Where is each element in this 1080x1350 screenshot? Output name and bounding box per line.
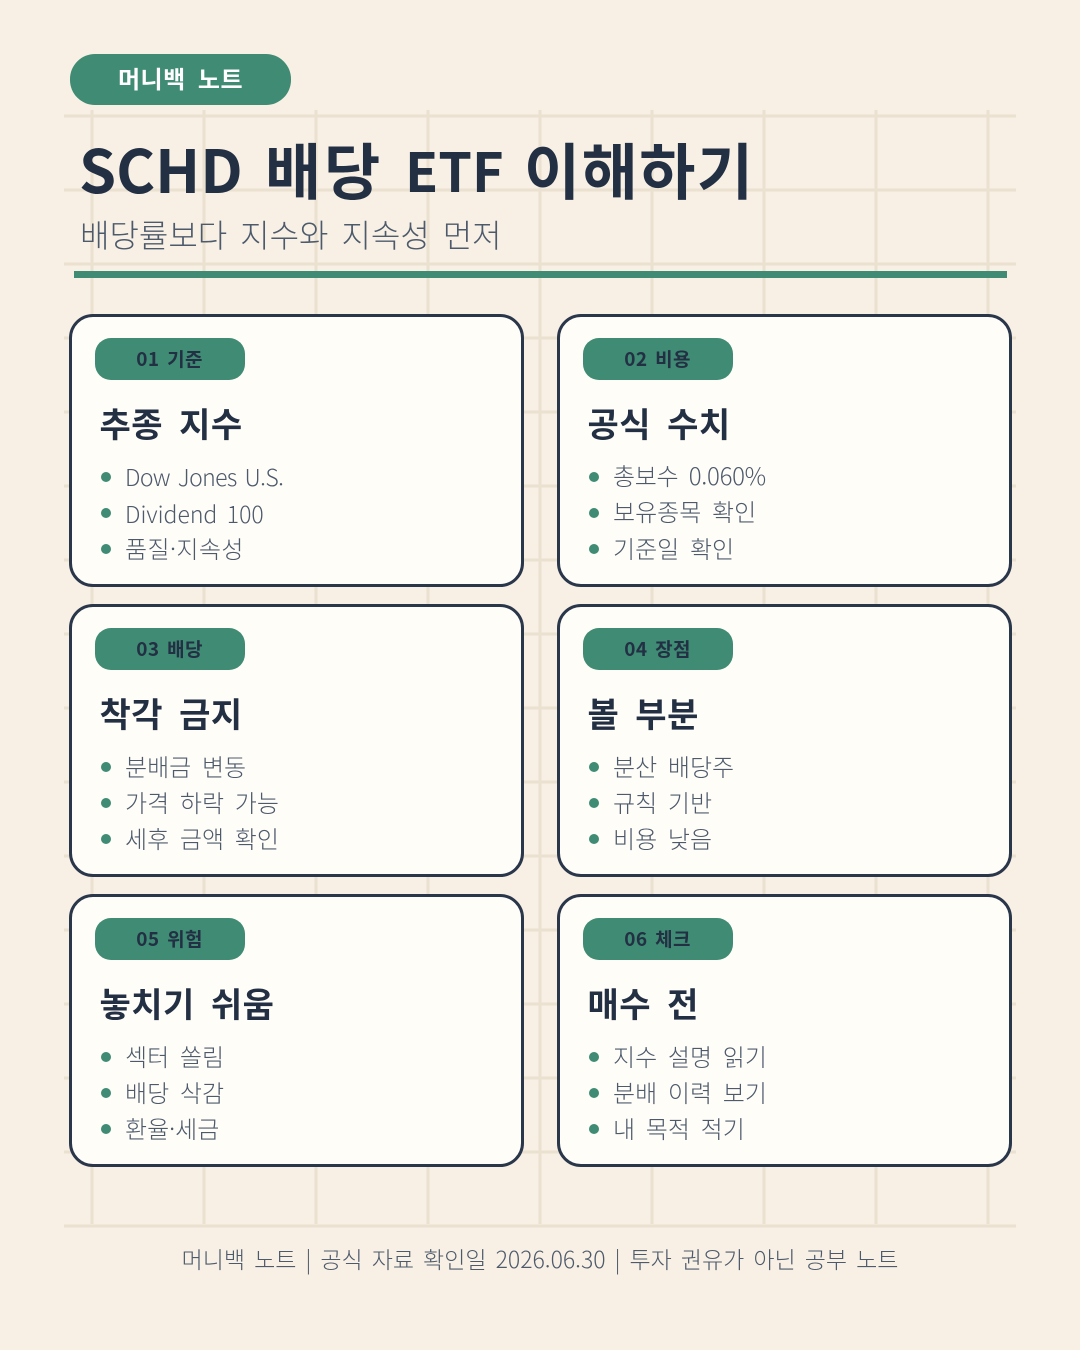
tag: 05: 05 위험 [136,925,203,952]
card heading: 놓치기 쉬움 [100,978,274,1027]
list [101,1038,224,1145]
tag: 05 [95,918,245,960]
list: 총보수 0.060% [613,457,766,492]
title [79,123,754,212]
panel: 04 장점 [557,604,1012,877]
tag: 04: 04 장점 [624,635,691,662]
panel: 03 배당 [69,604,524,877]
list: 보유종목 확인 [613,493,756,528]
tag: 03 [95,628,245,670]
card heading: 볼 부분 [588,688,699,737]
list: 비용 낮음 [613,820,712,855]
list: 분산 배당주 [613,748,734,783]
list [101,748,279,855]
footer: 머니백 노트 | 공식 자료 확인일 2026.06.30 | 투자 권유가 아닌 공부 노트 [182,1241,898,1275]
list: 환율·세금 [125,1110,219,1145]
tag: 06: 06 체크 [624,925,691,952]
list: 기준일 확인 [613,530,734,565]
card heading: 착각 금지 [100,688,243,737]
brand badge [70,54,291,105]
tag: 02: 02 비용 [624,345,691,372]
list: 지수 설명 읽기 [613,1038,767,1073]
tag: 02 [583,338,733,380]
list: Dow Jones U.S. [125,459,283,493]
tag: 01 [95,338,245,380]
brand badge: 머니백 노트 [118,60,243,95]
list: 세후 금액 확인 [125,820,279,855]
panel: 02 비용 [557,314,1012,587]
list [101,459,283,565]
title: 이해하기 [524,123,754,212]
subtitle: 배당률보다 지수와 지속성 먼저 [80,211,502,257]
list: 배당 삭감 [125,1074,224,1109]
list [589,748,734,855]
panel: 01 기준 [69,314,524,587]
card heading: 추종 지수 [100,398,243,447]
panel: 05 위험 [69,894,524,1167]
list: Dividend 100 [125,496,264,530]
tag: 06 [583,918,733,960]
card heading: 매수 전 [588,978,699,1027]
title rule [74,271,1007,278]
list [589,1038,767,1145]
title: ETF [405,129,504,208]
title: 배당 [265,123,383,212]
list: 섹터 쏠림 [125,1038,224,1073]
list: 분배 이력 보기 [613,1074,767,1109]
panel: 06 체크 [557,894,1012,1167]
list: 내 목적 적기 [613,1110,745,1145]
list: 품질·지속성 [125,530,244,565]
list [589,457,766,565]
list: 분배금 변동 [125,748,246,783]
card heading: 공식 수치 [588,398,731,447]
tag: 03: 03 배당 [136,635,203,662]
list: 가격 하락 가능 [125,784,279,819]
title: SCHD [79,125,243,211]
tag: 01: 01 기준 [136,345,203,372]
list: 규칙 기반 [613,784,712,819]
tag: 04 [583,628,733,670]
